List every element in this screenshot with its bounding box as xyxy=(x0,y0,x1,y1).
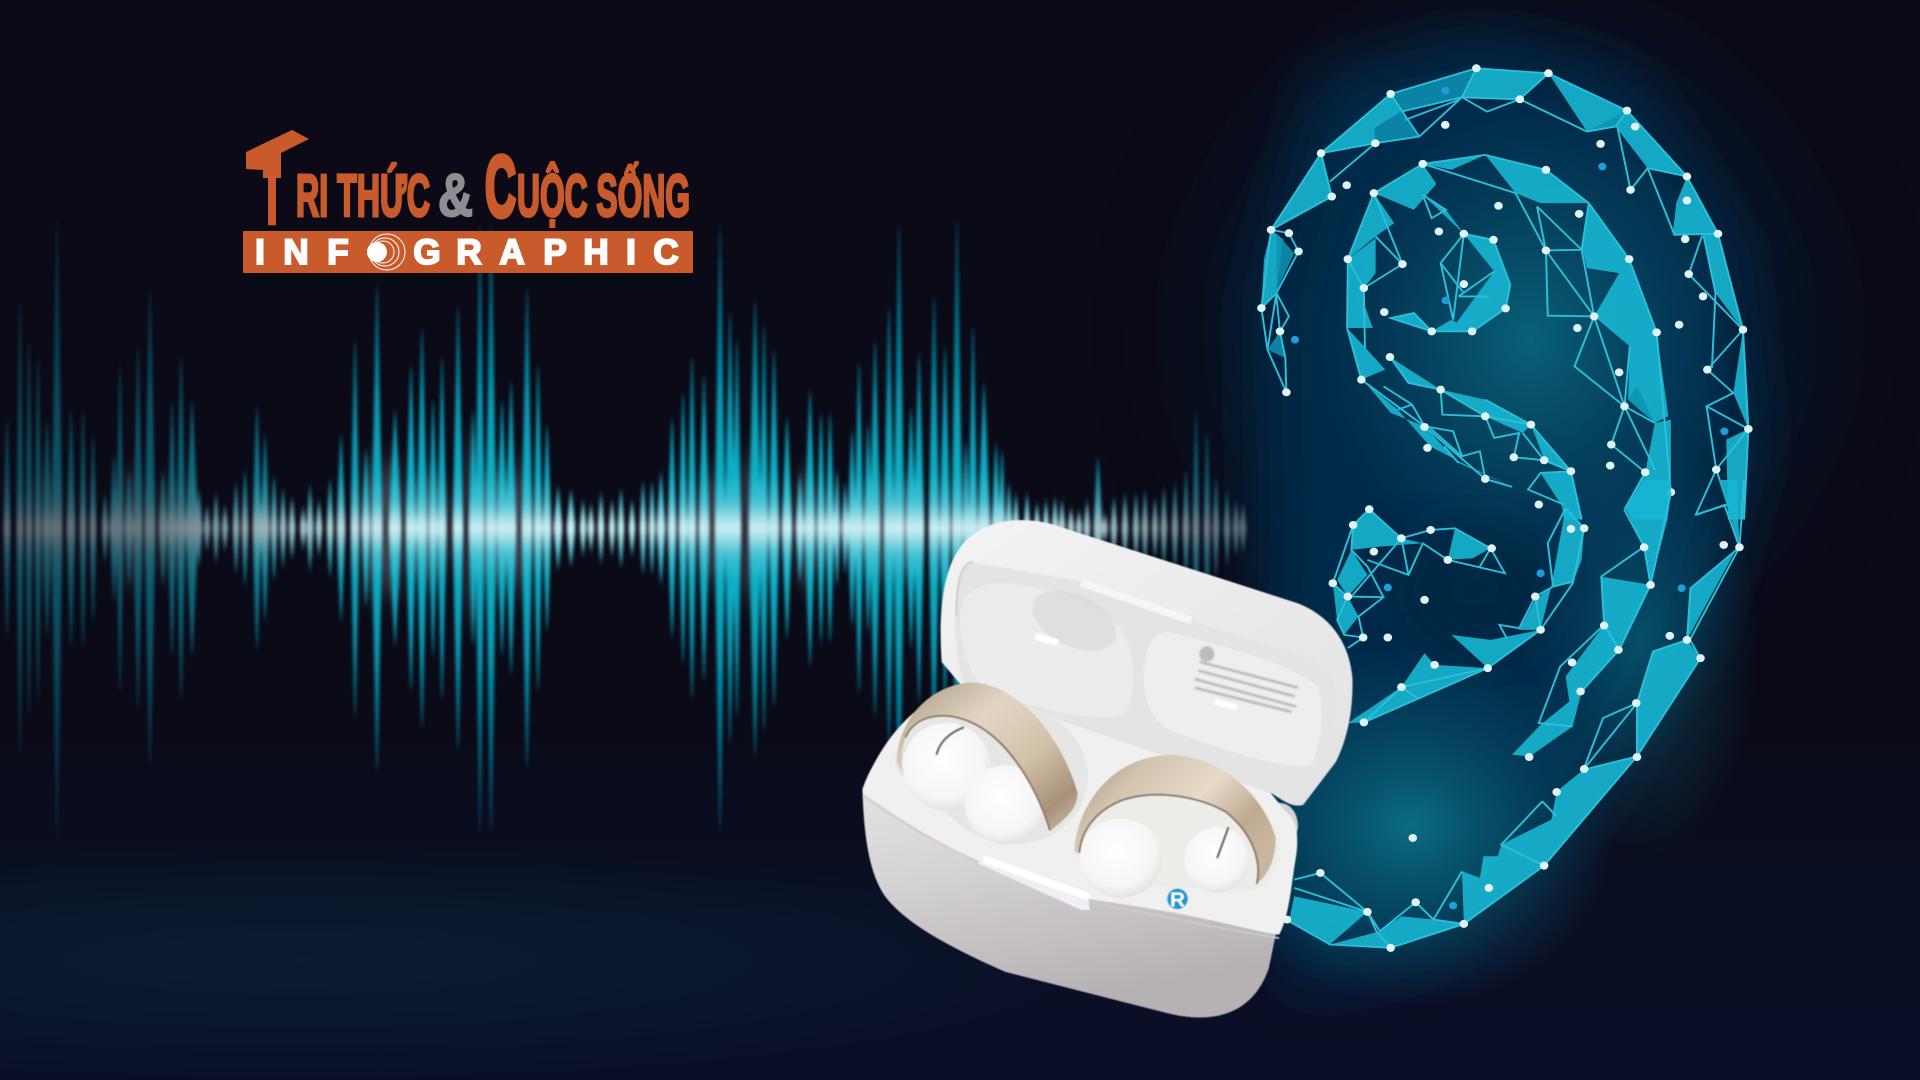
lid left cavity xyxy=(960,583,1133,718)
case LED light bar xyxy=(978,856,1090,910)
left gold ring xyxy=(897,683,1078,831)
ear upper blue dots xyxy=(1295,91,1724,501)
ear glow background xyxy=(1206,30,1800,1006)
ear upper wire lines xyxy=(1261,68,1748,520)
ear: lower low-poly mesh xyxy=(1287,480,1744,948)
ear lower bright facets xyxy=(1289,480,1739,948)
ear lower node dots xyxy=(1287,509,1739,948)
ear lower blue dots xyxy=(1388,573,1682,906)
logo title line: RI THỨC xyxy=(296,163,430,229)
logo: Tri Thức & Cuộc Sống xyxy=(243,130,693,273)
logo infographic bar: GRAPHIC xyxy=(413,233,679,272)
charging case with ring earbuds xyxy=(862,520,1353,1018)
logo title line: C xyxy=(485,139,516,235)
logo title line: & xyxy=(438,162,473,229)
ear upper dark facets xyxy=(1267,68,1655,423)
ear: upper low-poly mesh xyxy=(1261,68,1748,520)
sound waveform xyxy=(4,222,1246,834)
logo title line: UỘC SỐNG xyxy=(517,162,690,229)
blue R badge: R xyxy=(1170,888,1185,911)
logo title line: T xyxy=(265,141,279,235)
case base xyxy=(862,703,1298,1018)
right gold ring xyxy=(1074,755,1276,884)
left well and earbuds xyxy=(895,683,1088,844)
ear lower wire lines xyxy=(1289,480,1744,948)
lid cavity details xyxy=(1023,578,1298,712)
right well and earbuds xyxy=(1074,755,1279,898)
logo infographic bar xyxy=(243,231,693,273)
ear upper bright facets xyxy=(1261,68,1748,520)
logo swirl icon xyxy=(367,234,405,270)
lid right cavity xyxy=(1143,632,1322,766)
logo infographic bar: INF xyxy=(255,233,349,272)
ear upper node dots xyxy=(1261,68,1748,505)
waveform centre haze xyxy=(39,433,971,623)
case lid xyxy=(941,520,1353,806)
waveform bars xyxy=(4,222,1246,834)
logo title line xyxy=(246,130,690,235)
